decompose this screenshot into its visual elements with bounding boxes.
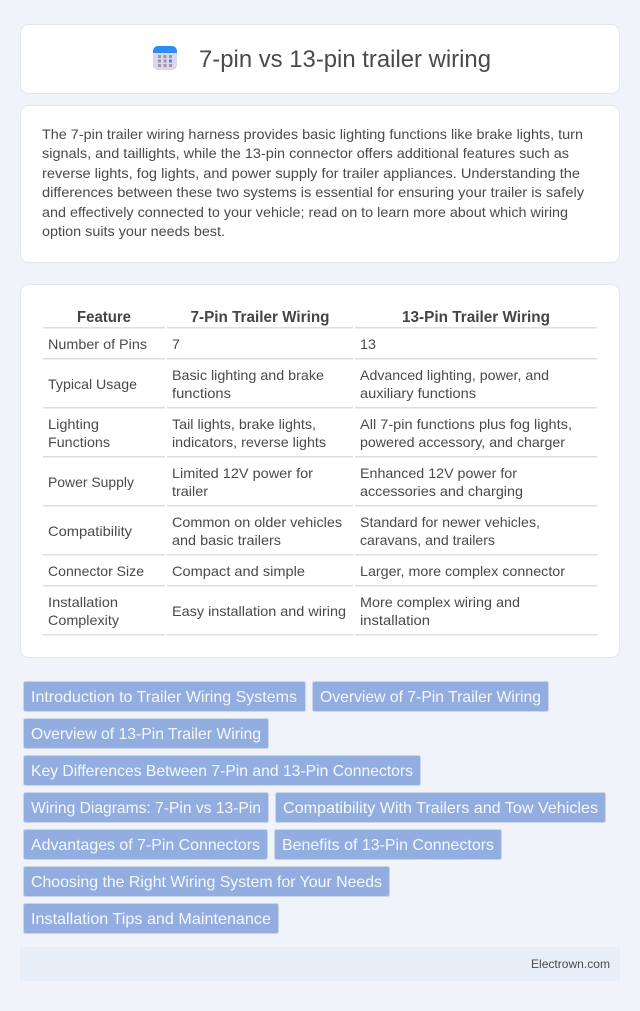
- intro text: and effectively connected to your vehicle; read on to learn more about which wiring: [42, 204, 568, 220]
- tag: [24, 792, 268, 822]
- row: typical usage: auxiliary functions: [360, 385, 476, 401]
- tag: Key Differences Between 7-Pin and 13-Pin Connectors: [31, 763, 413, 780]
- row: number of pins: 13: [360, 336, 376, 352]
- tag: [24, 682, 306, 712]
- row: installation complexity: installation: [360, 612, 430, 628]
- table header: 7-Pin Trailer Wiring: [190, 309, 330, 326]
- footer: Electrown.com: [531, 957, 610, 971]
- row: number of pins: 7: [172, 336, 180, 352]
- row: compatibility: [48, 514, 540, 548]
- row: installation complexity: More complex wiring and: [360, 594, 520, 610]
- row: power supply: Enhanced 12V power for: [360, 465, 517, 481]
- tag: Overview of 13-Pin Trailer Wiring: [31, 726, 261, 743]
- tag: Choosing the Right Wiring System for Your Needs: [31, 874, 382, 891]
- row: connector size: [48, 563, 565, 579]
- row: installation complexity: Easy installation and wiring: [172, 603, 346, 619]
- row: power supply: Power Supply: [48, 474, 134, 490]
- tag: Overview of 7-Pin Trailer Wiring: [320, 689, 541, 706]
- intro text: reverse lights, fog lights, and power supply for trailer appliances. Understanding the: [42, 165, 580, 181]
- intro text: option suits your needs best.: [42, 223, 225, 239]
- row: power supply: trailer: [172, 483, 208, 499]
- row: compatibility: Standard for newer vehicles,: [360, 514, 540, 530]
- row: installation complexity: [48, 594, 520, 628]
- tag: [276, 792, 606, 822]
- header panel: [20, 24, 620, 94]
- footer: [20, 947, 620, 981]
- row: lighting functions: Lighting: [48, 416, 99, 432]
- row: typical usage: Advanced lighting, power, and: [360, 367, 549, 383]
- row: typical usage: functions: [172, 385, 231, 401]
- row: typical usage: Basic lighting and brake: [172, 367, 324, 383]
- row: lighting functions: [48, 416, 572, 450]
- row: compatibility: Common on older vehicles: [172, 514, 342, 530]
- tag: [24, 830, 268, 860]
- row: power supply: accessories and charging: [360, 483, 523, 499]
- row: compatibility: caravans, and trailers: [360, 532, 495, 548]
- row: installation complexity: Complexity: [48, 612, 119, 628]
- row: lighting functions: All 7-pin functions plus fog lights,: [360, 416, 572, 432]
- tag: [24, 756, 420, 786]
- tag: Introduction to Trailer Wiring Systems: [31, 689, 297, 706]
- title: 7-pin vs 13-pin trailer wiring: [199, 46, 491, 73]
- row: lighting functions: Tail lights, brake lights,: [172, 416, 316, 432]
- row: lighting functions: Functions: [48, 434, 110, 450]
- tag: [24, 718, 268, 748]
- topic tags: [24, 682, 606, 934]
- row: number of pins: Number of Pins: [48, 336, 147, 352]
- row: connector size: Larger, more complex connector: [360, 563, 565, 579]
- row: number of pins: [48, 336, 376, 352]
- row: lighting functions: powered accessory, and charger: [360, 434, 565, 450]
- row: typical usage: [48, 367, 549, 401]
- tag: [24, 866, 390, 896]
- tag: Installation Tips and Maintenance: [31, 911, 271, 928]
- table header: [77, 309, 550, 326]
- icon: calendar: [153, 46, 177, 70]
- row: compatibility: Compatibility: [48, 523, 132, 539]
- panel: introduction: [20, 106, 620, 262]
- row: connector size: Compact and simple: [172, 563, 305, 579]
- tag: Advantages of 7-Pin Connectors: [31, 837, 260, 854]
- table header: 13-Pin Trailer Wiring: [402, 309, 550, 326]
- tag: [24, 904, 278, 934]
- row: compatibility: and basic trailers: [172, 532, 281, 548]
- tag: Benefits of 13-Pin Connectors: [282, 837, 494, 854]
- tag: [274, 830, 502, 860]
- panel: comparison table: [20, 284, 620, 658]
- row: power supply: Limited 12V power for: [172, 465, 313, 481]
- tag: Compatibility With Trailers and Tow Vehicles: [283, 800, 598, 817]
- intro text: The 7-pin trailer wiring harness provides basic lighting functions like brake lights, turn: [42, 126, 583, 142]
- row: connector size: Connector Size: [48, 563, 144, 579]
- intro text: signals, and taillights, while the 13-pin connector offers additional features such as: [42, 145, 569, 161]
- row: typical usage: Typical Usage: [48, 376, 137, 392]
- tag: Wiring Diagrams: 7-Pin vs 13-Pin: [31, 800, 261, 817]
- tag: [312, 682, 548, 712]
- intro text: differences between these two systems is essential for ensuring your trailer is safely: [42, 184, 584, 200]
- row: installation complexity: Installation: [48, 594, 118, 610]
- intro text: [42, 126, 584, 239]
- row: power supply: [48, 465, 523, 499]
- table header: Feature: [77, 309, 131, 326]
- row: lighting functions: indicators, reverse lights: [172, 434, 326, 450]
